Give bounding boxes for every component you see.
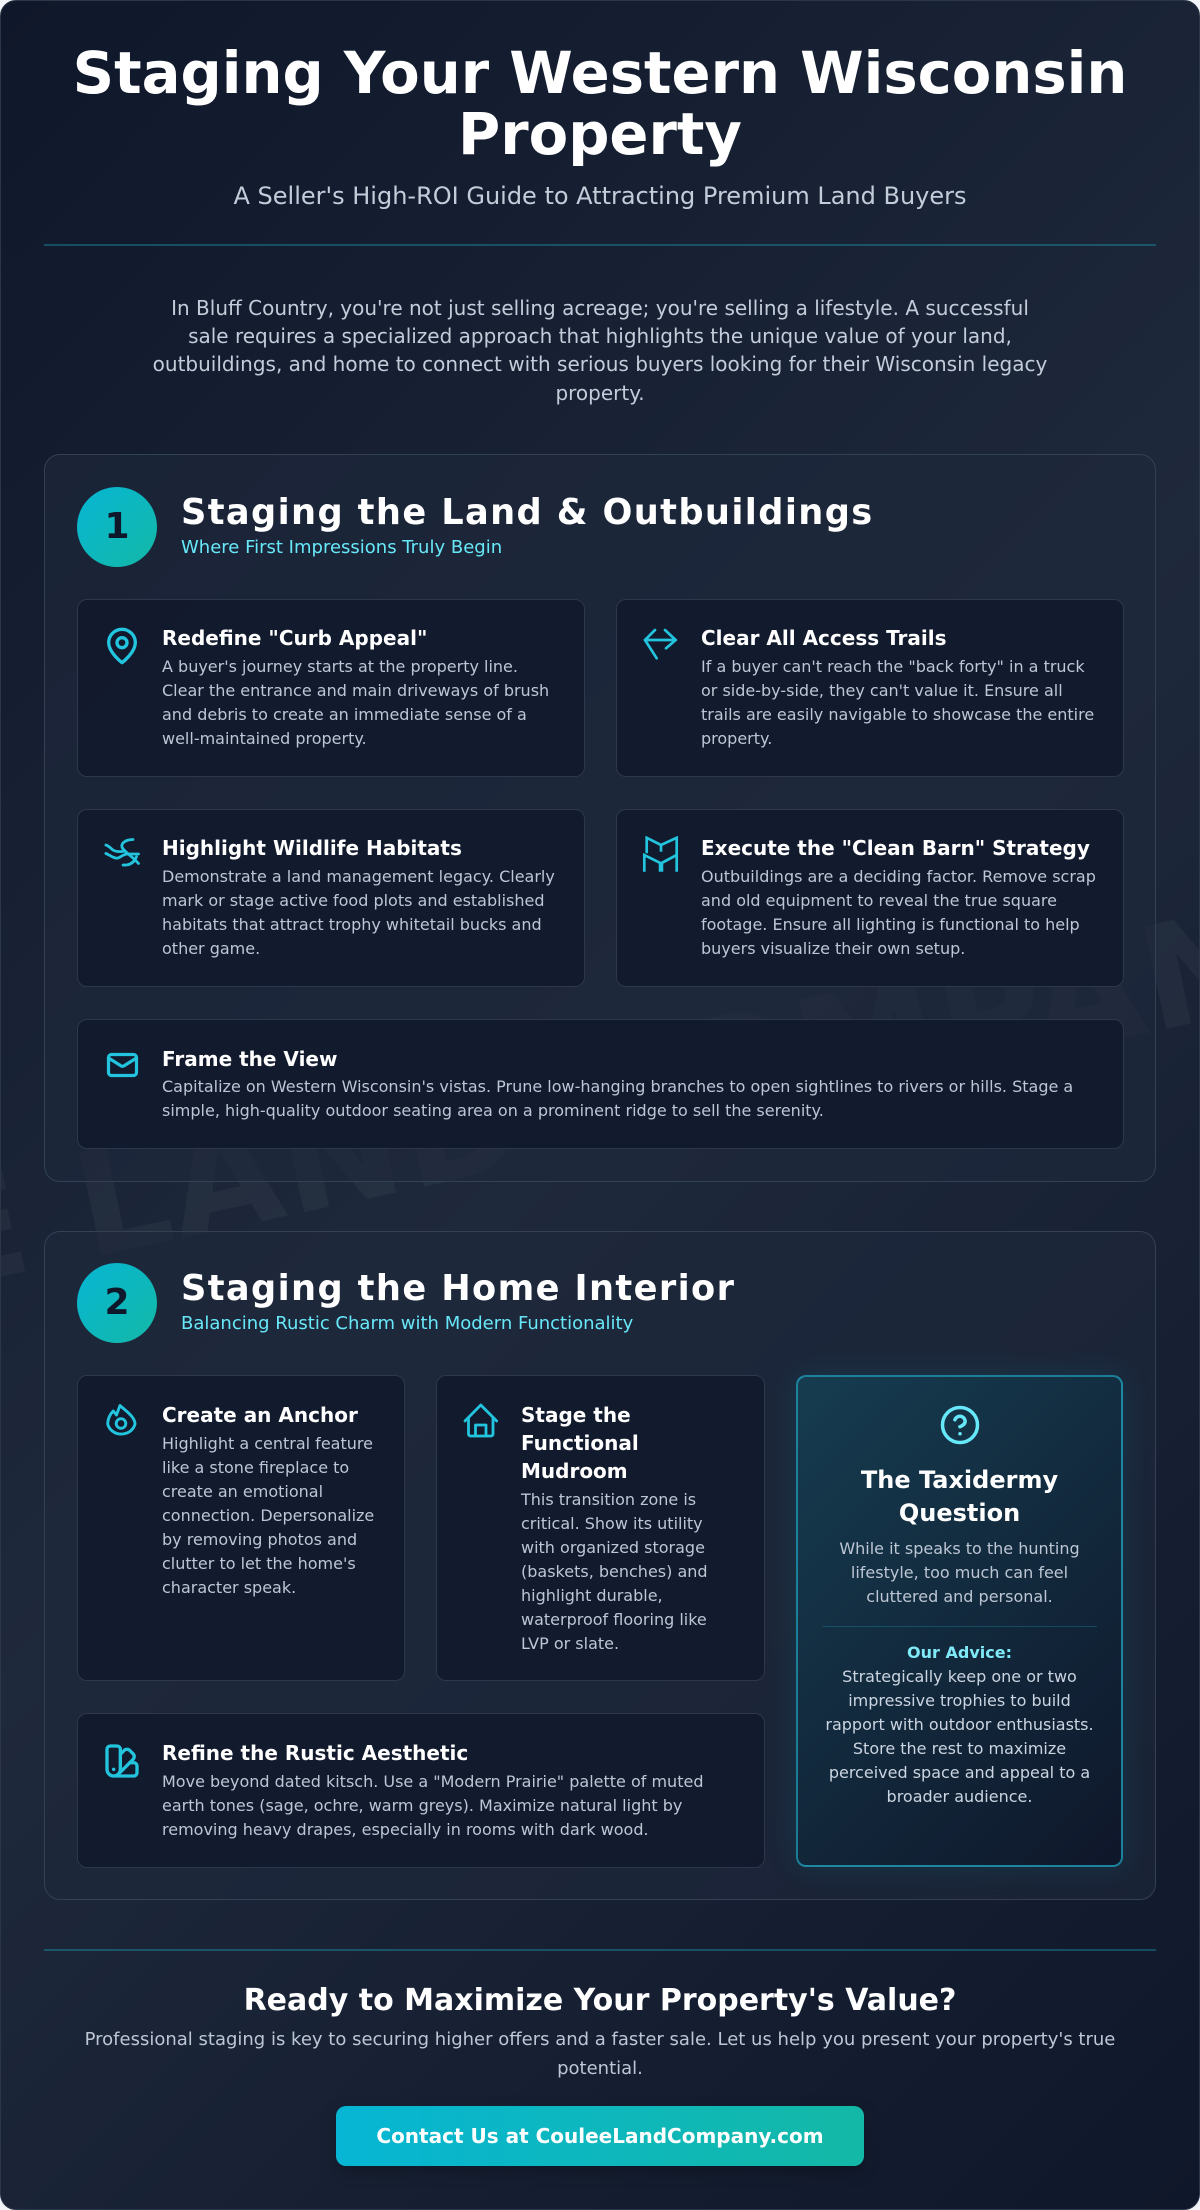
intro text: In Bluff Country, you're not just selling acreage; you're selling a lifestyle. A successful — [171, 296, 1029, 320]
title: Property — [458, 100, 742, 168]
section 2 subheading: Balancing Rustic Charm with Modern Functionality — [181, 1313, 633, 1334]
section 2 number badge — [77, 1263, 157, 1343]
card text: Clear All Access Trails — [701, 626, 947, 650]
card text — [162, 1403, 374, 1597]
card text: property. — [701, 729, 772, 748]
card text: with organized storage — [521, 1538, 705, 1557]
icon: split arrows — [644, 628, 678, 660]
callout advice: broader audience. — [887, 1787, 1032, 1806]
card text: Mudroom — [521, 1459, 628, 1483]
card text: A buyer's journey starts at the property line. — [162, 657, 518, 676]
closing heading: Ready to Maximize Your Property's Value? — [244, 1983, 956, 2018]
icon: wildlife tracks — [104, 838, 140, 866]
card text — [162, 626, 549, 748]
section 1 heading: Staging the Land & Outbuildings — [181, 492, 874, 533]
call to action button: Contact Us at CouleeLandCompany.com — [376, 2124, 824, 2148]
callout advice: Our Advice: — [907, 1643, 1012, 1662]
card text: trails are easily navigable to showcase the entire — [701, 705, 1094, 724]
card: frame the view — [77, 1019, 1124, 1149]
card text: like a stone fireplace to — [162, 1458, 349, 1477]
closing text: potential. — [557, 2058, 643, 2079]
card text: Refine the Rustic Aesthetic — [162, 1741, 468, 1765]
card text: and old equipment to reveal the true square — [701, 891, 1057, 910]
card text: Highlight Wildlife Habitats — [162, 836, 462, 860]
section 1 subheading: Where First Impressions Truly Begin — [181, 537, 502, 558]
card text: well-maintained property. — [162, 729, 367, 748]
icon: swatch book — [105, 1744, 139, 1778]
card text — [162, 836, 555, 958]
card text: buyers visualize their own setup. — [701, 939, 965, 958]
callout heading: The Taxidermy — [861, 1466, 1058, 1494]
card text — [162, 1741, 703, 1839]
intro text: outbuildings, and home to connect with serious buyers looking for their Wisconsin legacy — [153, 352, 1047, 376]
panel: section 2 background — [44, 1231, 1156, 1900]
card text: connection. Depersonalize — [162, 1506, 374, 1525]
card text: clutter to let the home's — [162, 1554, 356, 1573]
closing text: Professional staging is key to securing higher offers and a faster sale. Let us help you present your property's true — [85, 2029, 1115, 2050]
call to action button — [336, 2106, 864, 2166]
icon: envelope — [106, 1052, 138, 1078]
section 1 number badge: 1 — [104, 506, 130, 547]
card: clean barn — [616, 809, 1124, 987]
callout heading: Question — [899, 1498, 1020, 1526]
icon: map pin — [107, 628, 137, 664]
panel: section 1 background — [44, 454, 1156, 1182]
card text: Frame the View — [162, 1047, 337, 1071]
card text: critical. Show its utility — [521, 1514, 703, 1533]
callout text: cluttered and personal. — [866, 1587, 1053, 1606]
card text — [520, 1403, 708, 1653]
card text: highlight durable, — [521, 1586, 663, 1605]
callout text: While it speaks to the hunting — [839, 1539, 1080, 1558]
card text: Create an Anchor — [162, 1403, 358, 1427]
card text: Clear the entrance and main driveways of brush — [162, 681, 549, 700]
card text: character speak. — [162, 1578, 296, 1597]
card text — [701, 626, 1094, 748]
callout text — [839, 1539, 1080, 1606]
card text: other game. — [162, 939, 260, 958]
callout: taxidermy question — [796, 1375, 1123, 1867]
section 2 heading: Staging the Home Interior — [181, 1268, 735, 1309]
card text: If a buyer can't reach the "back forty" in a truck — [701, 657, 1085, 676]
card: rustic aesthetic — [77, 1713, 765, 1868]
card text: Move beyond dated kitsch. Use a "Modern Prairie" palette of muted — [162, 1772, 703, 1791]
card text: Functional — [521, 1431, 639, 1455]
callout advice: rapport with outdoor enthusiasts. — [825, 1715, 1094, 1734]
card text: Highlight a central feature — [162, 1434, 373, 1453]
callout advice: impressive trophies to build — [848, 1691, 1071, 1710]
card text: Outbuildings are a deciding factor. Remove scrap — [701, 867, 1096, 886]
card text: waterproof flooring like — [521, 1610, 707, 1629]
icon: question mark — [940, 1406, 980, 1444]
card text — [162, 1047, 1073, 1120]
subtitle: A Seller's High-ROI Guide to Attracting Premium Land Buyers — [234, 182, 966, 210]
card text: simple, high-quality outdoor seating area on a prominent ridge to sell the serenity. — [162, 1101, 824, 1120]
card text: by removing photos and — [162, 1530, 357, 1549]
card text: or side-by-side, they can't value it. Ensure all — [701, 681, 1063, 700]
title — [73, 40, 1127, 168]
card text: and debris to create an immediate sense of a — [162, 705, 527, 724]
section 2 number badge: 2 — [104, 1282, 130, 1323]
card: create an anchor — [77, 1375, 405, 1681]
card text: This transition zone is — [521, 1490, 696, 1509]
callout advice — [825, 1643, 1094, 1806]
card text: footage. Ensure all lighting is functional to help — [701, 915, 1080, 934]
intro text: sale requires a specialized approach that highlights the unique value of your land, — [188, 324, 1012, 348]
icon: house — [464, 1404, 498, 1438]
card text: LVP or slate. — [521, 1634, 619, 1653]
card text: habitats that attract trophy whitetail bucks and — [162, 915, 542, 934]
card text — [701, 836, 1096, 958]
card text: create an emotional — [162, 1482, 323, 1501]
card text: earth tones (sage, ochre, warm greys). Maximize natural light by — [162, 1796, 682, 1815]
card text: Redefine "Curb Appeal" — [162, 626, 427, 650]
card: wildlife habitats — [77, 809, 585, 987]
intro text: property. — [555, 381, 645, 405]
section 1 number badge — [77, 487, 157, 567]
card: access trails — [616, 599, 1124, 777]
callout advice: Store the rest to maximize — [853, 1739, 1066, 1758]
card text: mark or stage active food plots and established — [162, 891, 544, 910]
callout text: lifestyle, too much can feel — [851, 1563, 1068, 1582]
intro text — [153, 296, 1047, 405]
card text: Stage the — [521, 1403, 631, 1427]
icon: flame — [106, 1404, 136, 1436]
callout advice: Strategically keep one or two — [842, 1667, 1077, 1686]
closing text — [85, 2029, 1115, 2079]
icon: barn — [642, 836, 678, 872]
card text: (baskets, benches) and — [521, 1562, 708, 1581]
callout heading — [861, 1466, 1058, 1526]
card text: Capitalize on Western Wisconsin's vistas. Prune low-hanging branches to open sightlines to rivers or hills. Stage a — [162, 1077, 1073, 1096]
card text: Execute the "Clean Barn" Strategy — [701, 836, 1090, 860]
callout advice: perceived space and appeal to a — [829, 1763, 1090, 1782]
card: functional mudroom — [436, 1375, 765, 1681]
title: Staging Your Western Wisconsin — [73, 40, 1127, 107]
card text: Demonstrate a land management legacy. Clearly — [162, 867, 555, 886]
card: curb appeal — [77, 599, 585, 777]
card text: removing heavy drapes, especially in rooms with dark wood. — [162, 1820, 649, 1839]
